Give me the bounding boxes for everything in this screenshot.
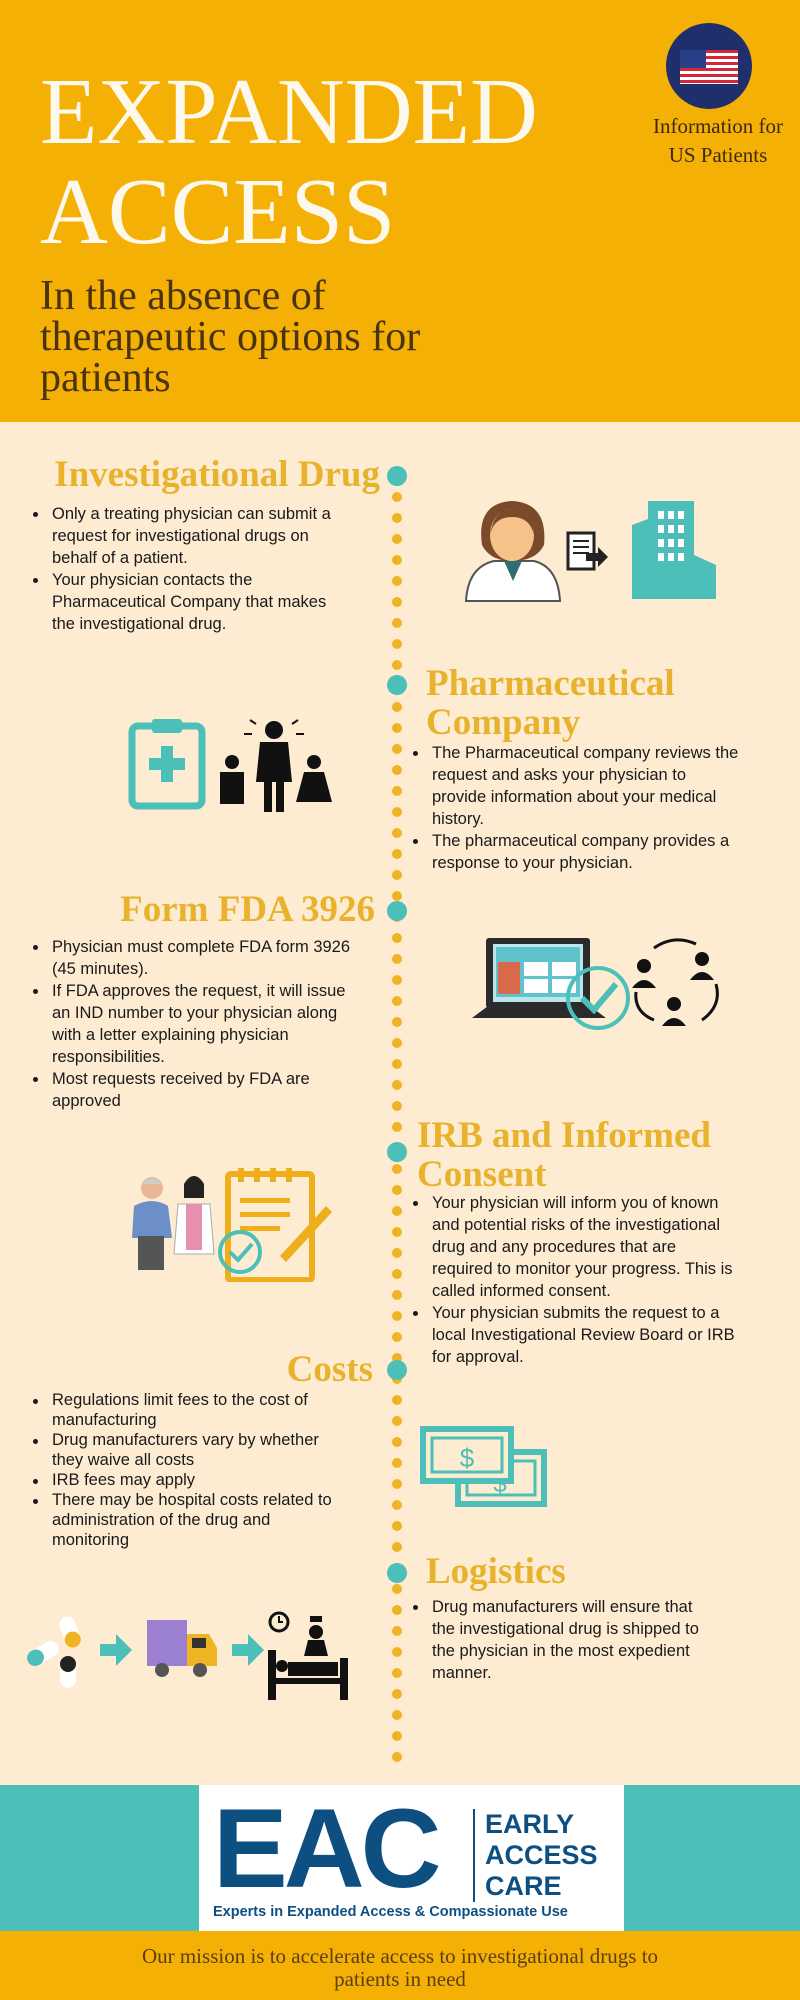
icon: patient, doctor and notepad	[132, 1168, 332, 1282]
bullets: manner.	[432, 1664, 492, 1682]
bullets	[413, 1598, 699, 1682]
title	[40, 60, 538, 264]
mission band	[0, 1931, 800, 2000]
logo wordmark: ACCESS	[485, 1840, 598, 1870]
bullets: behalf of a patient.	[52, 549, 188, 567]
bullets: an IND number to your physician along	[52, 1004, 337, 1022]
mission text: Our mission is to accelerate access to investigational drugs to	[142, 1944, 658, 1968]
bullets: manufacturing	[52, 1411, 157, 1429]
heading: Company	[426, 702, 580, 743]
icon: money	[420, 1426, 547, 1507]
bullets: with a letter explaining physician	[52, 1026, 289, 1044]
bullets: Regulations limit fees to the cost of	[52, 1391, 308, 1409]
bullets: The pharmaceutical company provides a	[432, 832, 729, 850]
bullets: for approval.	[432, 1348, 524, 1366]
bullets: request and asks your physician to	[432, 766, 686, 784]
heading: Logistics	[426, 1551, 566, 1592]
subtitle: therapeutic options for	[40, 314, 420, 360]
logo wordmark: EARLY	[485, 1809, 574, 1839]
bullets	[413, 1194, 735, 1366]
heading	[417, 1115, 711, 1195]
logo letters EAC: EAC	[213, 1786, 437, 1911]
section: IRB and Informed Consent	[413, 1115, 735, 1366]
heading	[426, 663, 675, 743]
bullets: request for investigational drugs on	[52, 527, 309, 545]
bullets: Pharmaceutical Company that makes	[52, 593, 326, 611]
bullets: Physician must complete FDA form 3926	[52, 938, 350, 956]
bullets: provide information about your medical	[432, 788, 716, 806]
heading: Investigational Drug	[54, 454, 380, 495]
bullets: Drug manufacturers will ensure that	[432, 1598, 692, 1616]
bullets: approved	[52, 1092, 121, 1110]
header band	[0, 0, 800, 422]
section: Pharmaceutical Company	[413, 663, 738, 872]
section: Logistics	[413, 1551, 699, 1682]
heading: Pharmaceutical	[426, 663, 675, 704]
mission text: patients in need	[334, 1967, 466, 1991]
bullets	[33, 505, 331, 633]
icon: money: $	[460, 1443, 475, 1473]
bullets: Your physician submits the request to a	[432, 1304, 719, 1322]
heading: Form FDA 3926	[120, 889, 375, 930]
bullets: they waive all costs	[52, 1451, 194, 1469]
bullets: IRB fees may apply	[52, 1471, 195, 1489]
heading: Costs	[287, 1349, 373, 1390]
bullets: Drug manufacturers vary by whether	[52, 1431, 319, 1449]
icon: laptop and cycle	[472, 938, 719, 1030]
info label: US Patients	[669, 143, 767, 167]
bullets: The Pharmaceutical company reviews the	[432, 744, 738, 762]
bullets: the physician in the most expedient	[432, 1642, 690, 1660]
bullets	[33, 938, 350, 1110]
bullets	[413, 744, 738, 872]
bullets: Only a treating physician can submit a	[52, 505, 331, 523]
section: Form FDA 3926	[33, 889, 375, 1110]
tagline: Experts in Expanded Access & Compassionate Use	[213, 1904, 568, 1920]
icon: money: $	[493, 1471, 507, 1498]
bullets: the investigational drug is shipped to	[432, 1620, 699, 1638]
subtitle: patients	[40, 355, 171, 401]
bullets: If FDA approves the request, it will issue	[52, 982, 345, 1000]
info label	[653, 114, 783, 167]
bullets: Most requests received by FDA are	[52, 1070, 310, 1088]
title: ACCESS	[40, 160, 395, 264]
bullets: There may be hospital costs related to	[52, 1491, 332, 1509]
bullets: called informed consent.	[432, 1282, 611, 1300]
heading: IRB and Informed	[417, 1115, 711, 1156]
icon: US flag	[666, 23, 752, 109]
subtitle: In the absence of	[40, 273, 326, 319]
logo wordmark: CARE	[485, 1871, 562, 1901]
heading: Consent	[417, 1154, 547, 1195]
bullets: drug and any procedures that are	[432, 1238, 676, 1256]
mission text	[142, 1944, 658, 1991]
logo wordmark	[473, 1809, 598, 1902]
info label: Information for	[653, 114, 783, 138]
bullets: response to your physician.	[432, 854, 633, 872]
icon: pills, truck, hospital bed	[27, 1612, 348, 1700]
bullets: Your physician contacts the	[52, 571, 252, 589]
bullets: the investigational drug.	[52, 615, 226, 633]
timeline	[387, 466, 407, 1762]
bullets: history.	[432, 810, 484, 828]
title: EXPANDED	[40, 60, 538, 164]
bullets: required to monitor your progress. This is	[432, 1260, 732, 1278]
section: Investigational Drug	[33, 454, 380, 633]
bullets: administration of the drug and	[52, 1511, 270, 1529]
logo panel	[199, 1785, 624, 1932]
icon: clipboard and people	[128, 719, 332, 812]
bullets: monitoring	[52, 1531, 129, 1549]
bullets: responsibilities.	[52, 1048, 165, 1066]
footer teal band	[0, 1785, 800, 1932]
bullets: local Investigational Review Board or IRB	[432, 1326, 735, 1344]
section: Costs	[33, 1349, 373, 1549]
icon: doctor to company	[464, 501, 716, 602]
bullets: (45 minutes).	[52, 960, 148, 978]
subtitle	[40, 273, 420, 401]
bullets: and potential risks of the investigational	[432, 1216, 720, 1234]
bullets	[33, 1391, 332, 1549]
bullets: Your physician will inform you of known	[432, 1194, 718, 1212]
